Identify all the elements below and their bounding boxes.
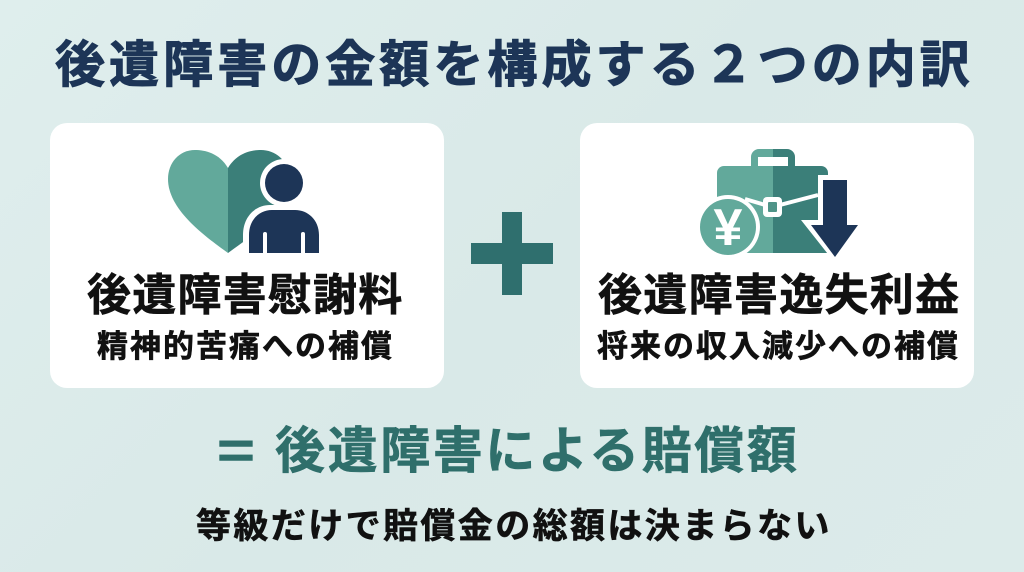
- icon: briefcase, yen coin and down arrow: ¥: [714, 199, 743, 257]
- result equation: [217, 422, 800, 480]
- equals sign: =: [217, 422, 255, 480]
- plus sign: [471, 212, 553, 295]
- heading: 後遺障害慰謝料: [87, 271, 403, 320]
- panel: 後遺障害慰謝料: [50, 123, 444, 388]
- subheading: 将来の収入減少への補償: [597, 329, 960, 364]
- icon: briefcase, yen coin and down arrow: [700, 149, 858, 257]
- result text: 後遺障害による賠償額: [275, 423, 800, 479]
- icon: heart and person: [168, 150, 319, 253]
- subheading: 精神的苦痛への補償: [97, 329, 394, 364]
- panel: 後遺障害逸失利益: [580, 123, 974, 388]
- footer note: 等級だけで賠償金の総額は決まらない: [196, 507, 832, 546]
- heading: 後遺障害逸失利益: [598, 271, 960, 320]
- title: 後遺障害の金額を構成する２つの内訳: [55, 37, 974, 93]
